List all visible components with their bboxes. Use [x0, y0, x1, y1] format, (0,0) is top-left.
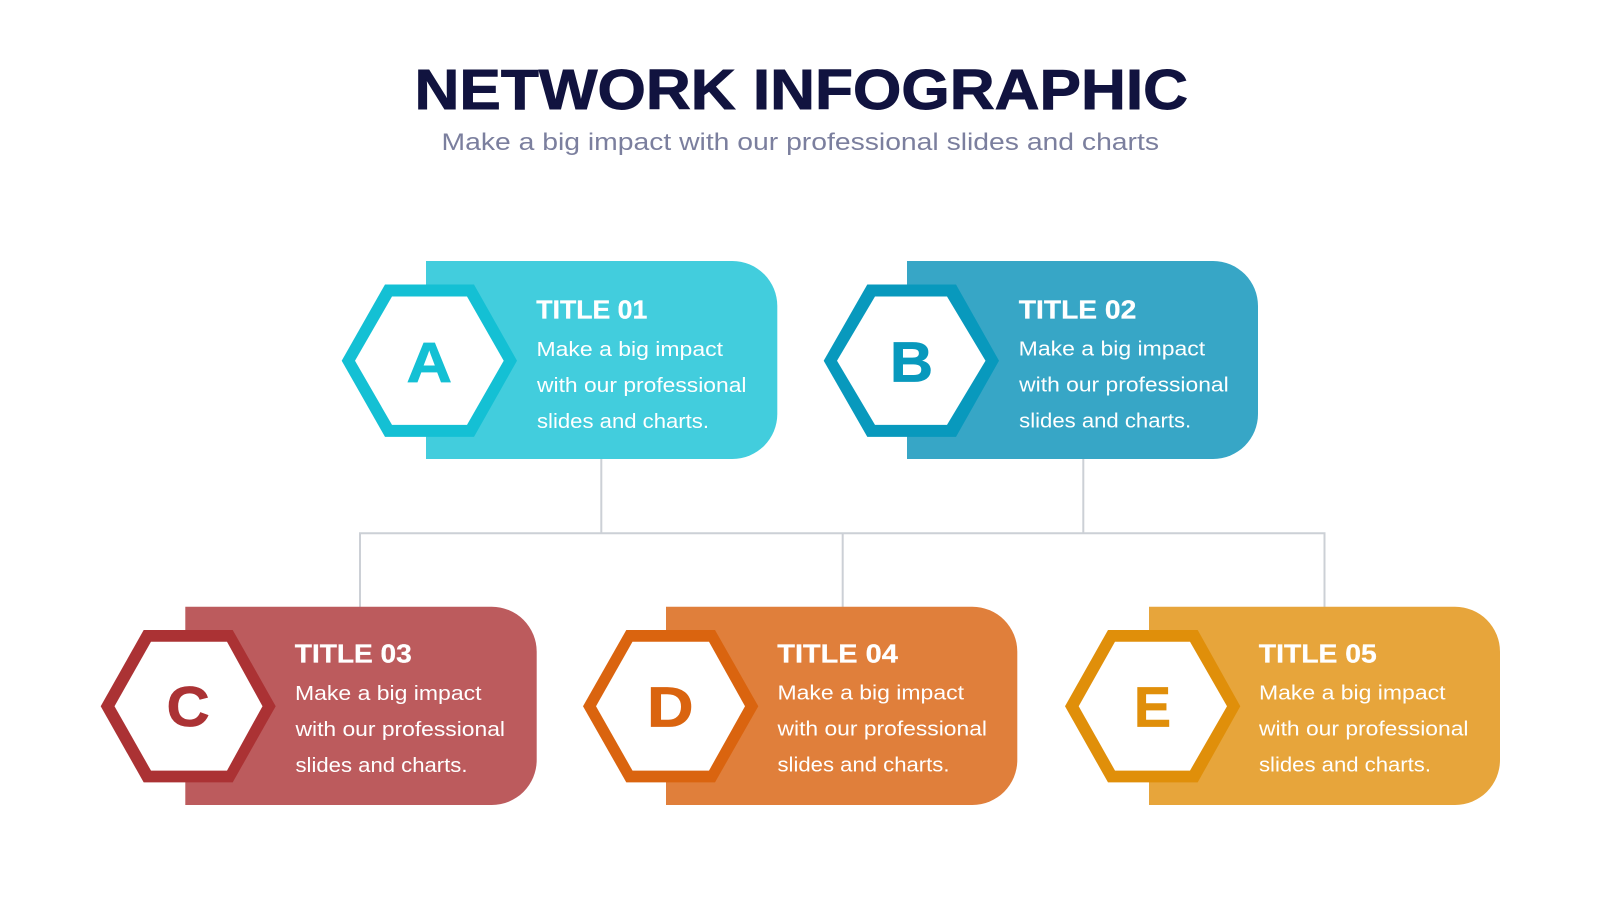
- text block E: with our professional: [1258, 719, 1468, 741]
- icon: hexagon B: [824, 284, 999, 437]
- text block D: slides and charts.: [778, 755, 950, 777]
- icon: hexagon C: C: [167, 675, 210, 739]
- icon: hexagon E: E: [1134, 676, 1171, 740]
- text block E: Make a big impact: [1259, 683, 1446, 705]
- heading: title 01: TITLE 01: [536, 296, 647, 324]
- network connector lines: [360, 459, 1324, 607]
- icon: hexagon B: B: [890, 330, 933, 394]
- card background B: [907, 261, 1258, 459]
- text block B: [1018, 338, 1229, 432]
- text block A: [536, 339, 746, 433]
- icon: hexagon C: [101, 630, 276, 782]
- icon: hexagon D: D: [647, 676, 694, 740]
- panel: card C: [101, 607, 537, 805]
- text block D: Make a big impact: [778, 683, 965, 705]
- text block A: slides and charts.: [537, 411, 709, 433]
- panel: card D: [583, 607, 1017, 805]
- text block C: slides and charts.: [296, 755, 468, 777]
- text block B: slides and charts.: [1019, 410, 1191, 432]
- text block A: with our professional: [536, 375, 746, 397]
- text block C: [294, 683, 505, 777]
- text block C: with our professional: [294, 719, 505, 741]
- heading: title 02: TITLE 02: [1019, 296, 1136, 324]
- text block B: Make a big impact: [1019, 338, 1206, 360]
- card background C: [185, 607, 537, 805]
- card background E: [1149, 607, 1500, 805]
- text block E: slides and charts.: [1259, 755, 1431, 777]
- heading: title 04: TITLE 04: [777, 641, 899, 669]
- text block B: with our professional: [1018, 374, 1229, 396]
- text block C: Make a big impact: [295, 683, 482, 705]
- subtitle: Make a big impact with our professional slides and charts: [442, 129, 1159, 156]
- heading: title 03: TITLE 03: [295, 641, 412, 669]
- icon: hexagon E: [1065, 630, 1240, 782]
- text block D: [776, 683, 987, 777]
- panel: card E: [1065, 607, 1500, 805]
- text block D: with our professional: [776, 719, 987, 741]
- icon: hexagon D: [583, 630, 758, 782]
- panel: card B: [824, 261, 1258, 459]
- text block E: [1258, 683, 1468, 777]
- icon: hexagon A: [342, 284, 517, 437]
- card background D: [666, 607, 1017, 805]
- text block A: Make a big impact: [536, 339, 724, 361]
- title: NETWORK INFOGRAPHIC: [414, 58, 1188, 121]
- card background A: [426, 261, 777, 459]
- panel: card A: [342, 261, 777, 459]
- heading: title 05: TITLE 05: [1259, 641, 1377, 669]
- icon: hexagon A: A: [406, 331, 452, 395]
